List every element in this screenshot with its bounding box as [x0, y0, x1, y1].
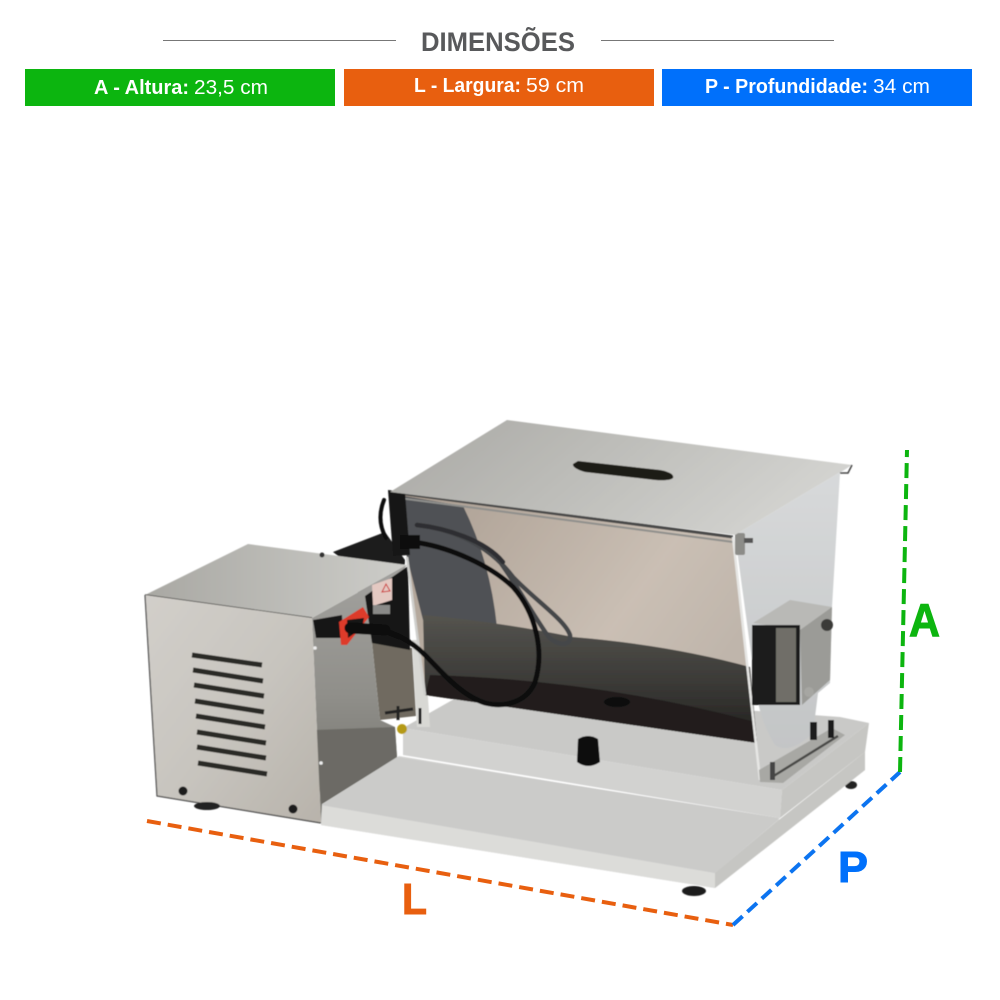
mixer front panel [388, 490, 760, 780]
label: A: A [909, 594, 940, 646]
rubber knob [577, 736, 600, 766]
lid [390, 420, 852, 535]
base plate [321, 752, 865, 896]
legend bar: largura: 59 cm [526, 75, 584, 97]
dimension line: altura [900, 450, 907, 772]
label: P: P [838, 843, 868, 892]
power plug [313, 607, 400, 645]
interior seen behind motor box [372, 643, 416, 720]
motor behind and cable inlet [333, 532, 405, 650]
label: L: L [402, 875, 427, 924]
dimension line: largura [147, 821, 733, 925]
cable clip [400, 535, 420, 549]
motor box top [145, 544, 407, 618]
legend bar: altura: 23,5 cm [194, 77, 268, 99]
hinge [735, 533, 753, 555]
legend bar: altura: A - Altura: [94, 77, 189, 99]
mounting foot [759, 720, 845, 783]
legend bar: profundidade [662, 69, 972, 106]
machine: meat mixer photo illustration [145, 420, 869, 896]
legend bar: altura [25, 69, 335, 106]
legend bar: largura [344, 69, 654, 106]
motor box side [312, 565, 410, 823]
title: dimensões: DIMENSÕES [421, 26, 575, 57]
power cables [370, 500, 570, 705]
mixer right side panel [735, 465, 852, 748]
legend bar: profundidade: 34 cm [873, 76, 930, 98]
legend bar: profundidade: P - Profundidade: [705, 76, 868, 98]
dimension line: profundidade [733, 772, 900, 925]
motor foot [194, 802, 220, 810]
legend bar: largura: L - Largura: [414, 75, 521, 97]
ventilation slots [192, 655, 267, 774]
raised platform [403, 690, 869, 818]
side bracket box [752, 600, 833, 705]
motor box front [145, 595, 321, 823]
warning label [372, 578, 392, 614]
